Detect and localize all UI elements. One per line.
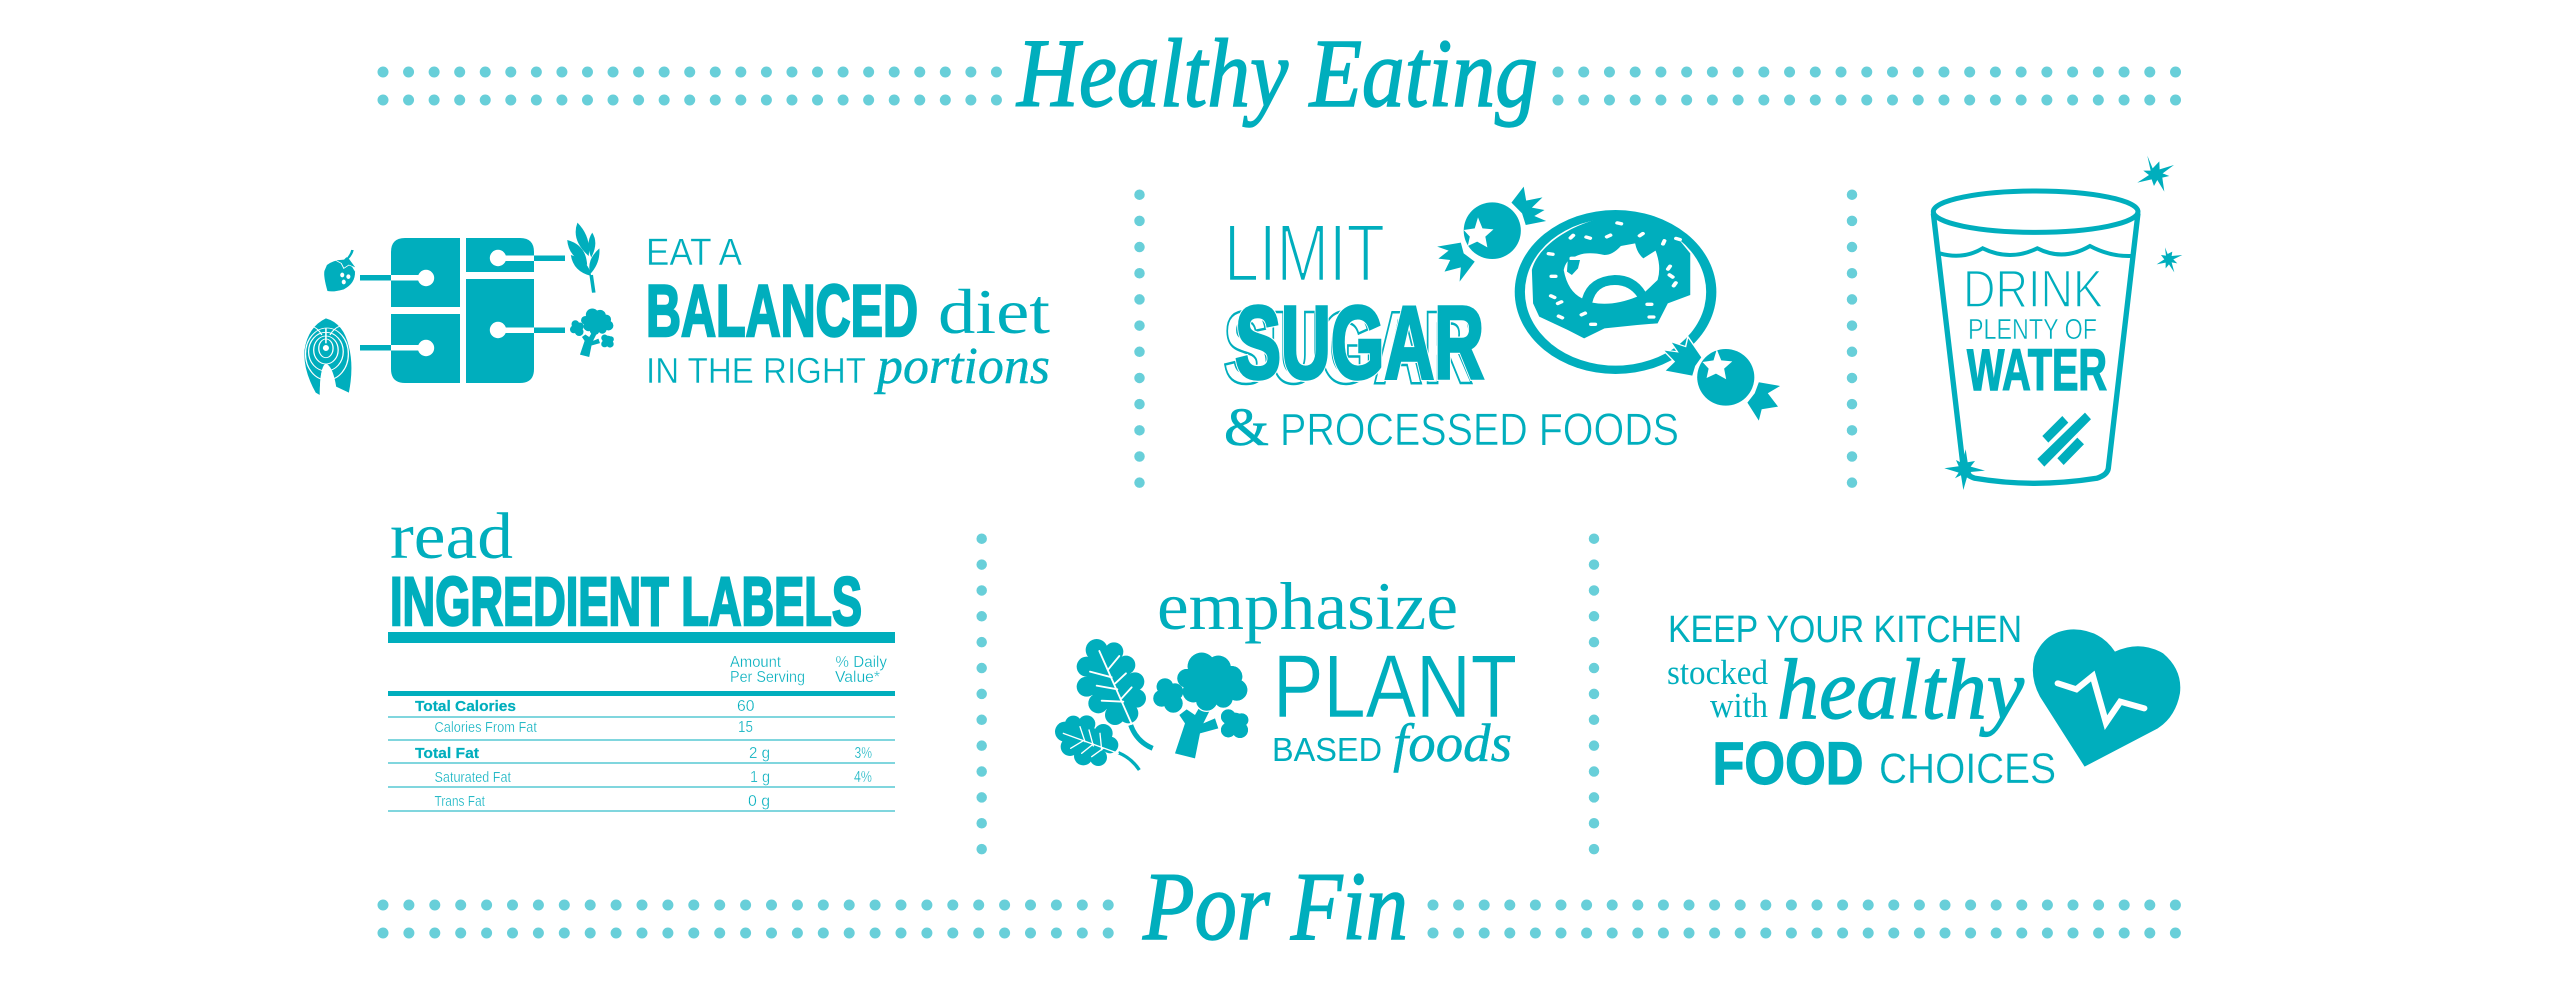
panel: keep your kitchen stocked [1667, 609, 2180, 797]
text: plant: PLANT [1273, 636, 1517, 736]
icon: small leaf [1055, 715, 1139, 770]
divider: dotted column two [1847, 195, 1857, 483]
icon: strawberry [324, 250, 357, 291]
chart: nutrition table [388, 632, 895, 812]
chart: nutrition table: Value* [835, 669, 880, 686]
icon: broccoli large [1153, 653, 1248, 758]
icon: salmon steak [304, 318, 351, 397]
divider: dotted column three [976, 539, 987, 850]
text: sugar with offset outline: SUGAR [1235, 285, 1484, 400]
text: healthy: healthy [1777, 641, 2025, 737]
text: keep your kitchen: KEEP YOUR KITCHEN [1668, 609, 2022, 651]
text: plenty of: PLENTY OF [1968, 314, 2097, 346]
chart: nutrition table: 15 [738, 719, 753, 736]
text: emphasize: emphasize [1157, 568, 1458, 644]
panel: read ingredient labels [388, 500, 895, 812]
text: based: BASED [1272, 731, 1382, 768]
text: balanced: BALANCED [646, 271, 918, 352]
text: eat a: EAT A [646, 232, 743, 274]
text: with: with [1710, 686, 1768, 725]
icon: water glass [1933, 191, 2138, 483]
icon: candy bottom [1665, 338, 1780, 421]
text: processed foods: PROCESSED FOODS [1280, 404, 1679, 455]
chart: nutrition table: 2 g [749, 745, 770, 762]
chart: nutrition table: Total Calories [415, 698, 516, 715]
chart: nutrition table: Amount [730, 654, 782, 671]
icon: heart with pulse [2033, 629, 2180, 767]
text: ingredient labels: INGREDIENT LABELS [390, 563, 862, 640]
icon: broccoli small [570, 308, 614, 357]
text: in the right: IN THE RIGHT [646, 350, 866, 391]
chart: nutrition table: Calories From Fat [434, 719, 538, 736]
chart: nutrition table: Trans Fat [434, 793, 486, 810]
text: choices: CHOICES [1879, 745, 2056, 793]
icon: donut [1515, 210, 1716, 374]
chart: nutrition table: Saturated Fat [434, 769, 512, 786]
text: water: WATER [1967, 338, 2107, 403]
icon: sparkles [1944, 156, 2182, 490]
panel: eat a balanced diet [304, 223, 1051, 397]
text: limit: LIMIT [1224, 208, 1385, 299]
text: read: read [390, 500, 513, 573]
text: ampersand: & [1224, 397, 1269, 457]
icon: wheat [567, 223, 599, 293]
icon: divided plate [360, 238, 565, 383]
heading: Healthy Eating: Healthy Eating [1015, 20, 1538, 127]
text: foods: foods [1393, 713, 1512, 773]
chart: nutrition table: 0 g [748, 793, 770, 810]
text: drink: DRINK [1963, 260, 2103, 319]
chart: nutrition table: Per Serving [730, 669, 805, 686]
icon: large leaf [1077, 639, 1153, 748]
panel: drink water [1933, 156, 2182, 490]
text: stocked: stocked [1667, 653, 1768, 692]
text: sugar with offset outline: SUGAR [1235, 285, 1484, 400]
chart: nutrition table: 3% [854, 745, 872, 762]
chart: nutrition table: 1 g [750, 769, 770, 786]
icon: candy top [1437, 187, 1546, 282]
heading: Por Fin: Por Fin [1142, 853, 1408, 960]
chart: nutrition table: % Daily [836, 654, 887, 671]
text: sugar with offset outline: SUGAR [1223, 290, 1473, 405]
text: diet: diet [938, 277, 1051, 347]
divider: dotted column four [1589, 539, 1599, 850]
chart: nutrition table: 60 [737, 698, 755, 715]
text: sugar with offset outline [1223, 285, 1484, 405]
panel: limit sugar [1223, 187, 1780, 457]
panel: emphasize plant based foods [1055, 568, 1517, 773]
text: food: FOOD [1712, 730, 1864, 797]
divider: dotted column one [1134, 195, 1145, 483]
text: portions: portions [873, 338, 1050, 395]
chart: nutrition table: 4% [854, 769, 872, 786]
chart: nutrition table: Total Fat [415, 745, 479, 762]
